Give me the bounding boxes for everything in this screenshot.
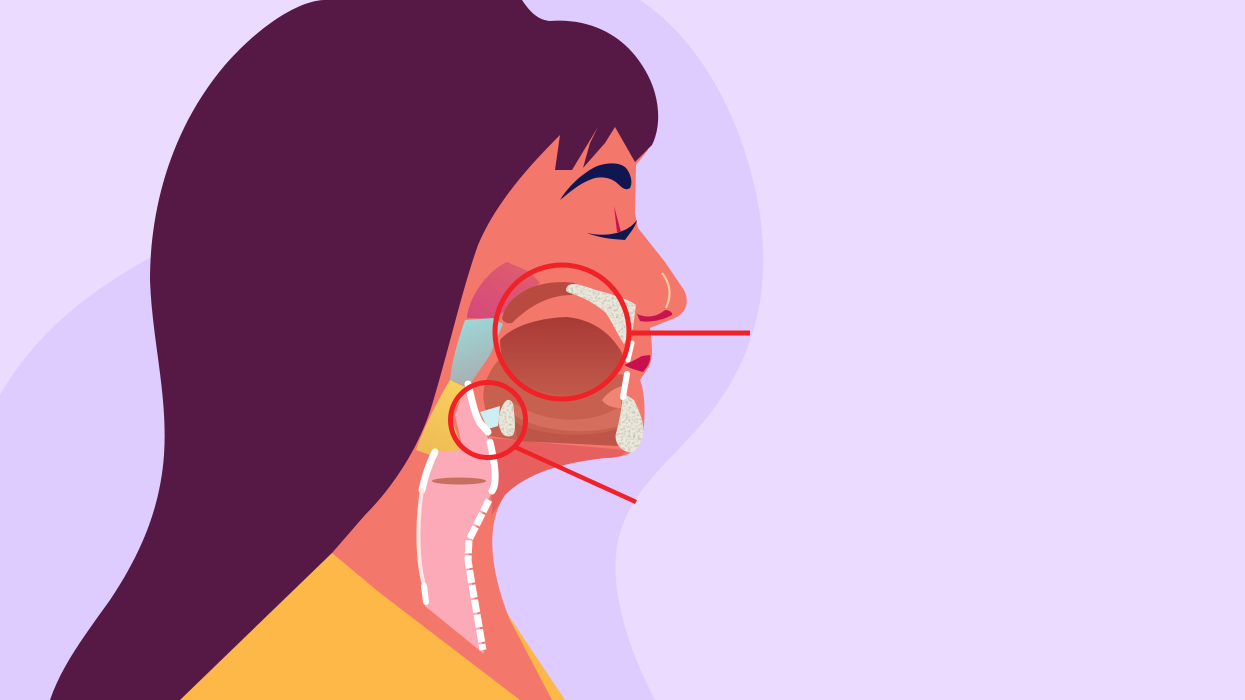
callout circle: throat bbox=[450, 382, 526, 458]
background blob bbox=[0, 0, 763, 700]
callout line: throat bbox=[515, 447, 636, 502]
lower mouth band: light bbox=[512, 402, 622, 431]
tongue tip bbox=[602, 386, 622, 408]
upper jaw bone bbox=[566, 284, 636, 344]
shirt bbox=[180, 553, 565, 700]
hair bbox=[50, 0, 658, 700]
lower jaw bone bbox=[616, 393, 643, 452]
callout line: mouth bbox=[630, 330, 750, 336]
nose line bbox=[662, 273, 669, 308]
anatomy: airway bbox=[416, 262, 643, 654]
tongue bbox=[500, 317, 622, 396]
lips bbox=[624, 355, 650, 372]
throat: yellow bbox=[416, 380, 468, 455]
neck shading bbox=[490, 438, 625, 515]
closed eye bbox=[587, 220, 637, 240]
eye crease bbox=[614, 206, 621, 232]
pink airway tube bbox=[418, 381, 495, 654]
eyebrow bbox=[560, 163, 631, 200]
face and neck skin bbox=[332, 90, 687, 700]
lower mouth cavity bbox=[483, 358, 625, 446]
upper throat: teal bbox=[450, 318, 503, 387]
soft palate band bbox=[502, 282, 575, 323]
lower mouth band: dark bbox=[514, 422, 620, 446]
upper throat: magenta bbox=[467, 262, 540, 319]
vocal cords bbox=[432, 478, 486, 484]
white airway lining bbox=[418, 343, 632, 650]
callout circle: mouth bbox=[495, 265, 629, 399]
nostril bbox=[637, 310, 672, 322]
light blue area bbox=[480, 406, 500, 429]
hyoid bone bbox=[499, 400, 515, 436]
